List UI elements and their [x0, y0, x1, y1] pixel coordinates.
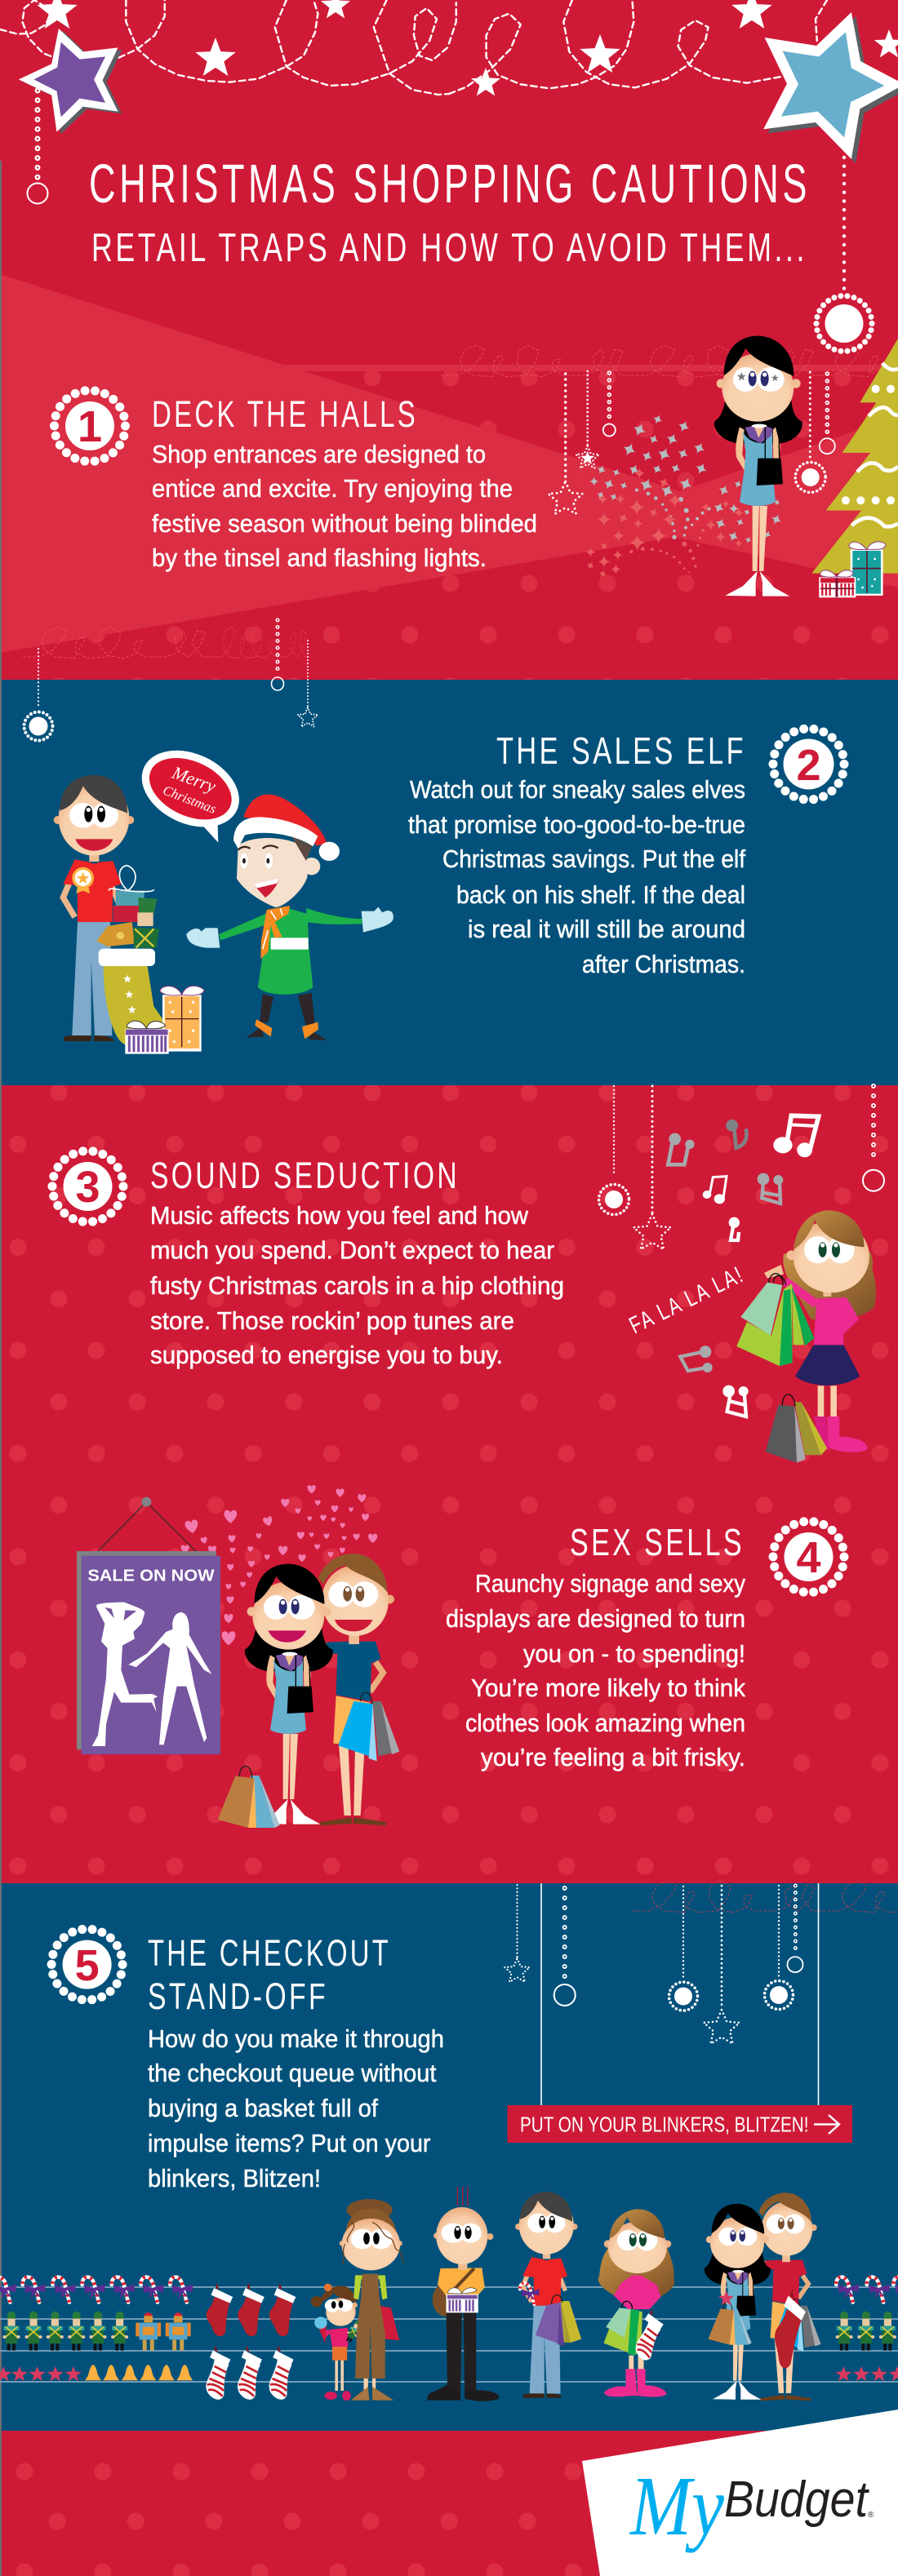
pink stars [0, 2366, 82, 2381]
section 4 text: you’re feeling a bit frisky. [481, 1743, 745, 1771]
child [311, 2284, 363, 2401]
purple and gold bags [520, 2283, 581, 2346]
blue star [763, 12, 898, 163]
section 2 text: Watch out for sneaky sales elves [410, 775, 745, 804]
hearts [181, 1485, 377, 1645]
section 3 text [150, 1201, 564, 1369]
christmas tree with gifts [811, 339, 898, 597]
section 5 heading: STAND-OFF [148, 1975, 328, 2017]
section 1 heading: DECK THE HALLS [152, 393, 418, 435]
section 5 badge: 5 [75, 1941, 100, 1990]
section 2 text: back on his shelf. If the deal [456, 880, 745, 909]
hanging bead string with ring, left [28, 91, 47, 204]
section 4 poster with hearts [77, 1485, 377, 1754]
music notes [668, 1115, 819, 1417]
girl with bags in queue [598, 2209, 674, 2397]
section 2 hanging decorations [24, 620, 318, 741]
section 1 text: festive season without being blinded [152, 509, 537, 538]
woman with sparkling eyes [714, 336, 802, 596]
striped stockings [206, 2345, 294, 2400]
pink stars [835, 2366, 898, 2381]
section 5 text: How do you make it through [148, 2024, 444, 2053]
section 5 heading [148, 1932, 391, 2017]
purple gift [125, 1021, 169, 1054]
section 1 text: Shop entrances are designed to [152, 440, 486, 468]
customer with candy cane and bags [515, 2192, 581, 2398]
section 5 text: blinkers, Blitzen! [148, 2164, 321, 2192]
section 4 text: displays are designed to turn [446, 1604, 745, 1633]
section 3 hanging decorations [599, 1086, 884, 1249]
section 1 badge [54, 390, 126, 462]
red stockings [207, 2282, 296, 2336]
couple [218, 1554, 399, 1828]
speech bubble merry christmas: Merry [169, 762, 219, 796]
woman in overalls [340, 2199, 404, 2401]
section 2 heading: THE SALES ELF [496, 729, 746, 772]
section 5 hanging decorations [505, 1885, 803, 2044]
section 3 heading: SOUND SEDUCTION [150, 1155, 460, 1196]
sales elf [186, 795, 393, 1040]
right shelf items [427, 2186, 898, 2401]
mouth [75, 839, 113, 851]
candy canes [836, 2277, 898, 2303]
section 4 heading: SEX SELLS [570, 1521, 745, 1563]
ribbon badge [72, 867, 94, 893]
section 4 badge: 4 [796, 1533, 821, 1582]
poster: SALE ON NOW [87, 1566, 215, 1585]
section 1 text [152, 440, 537, 572]
section 5 heading: THE CHECKOUT [148, 1932, 391, 1974]
section 2 blue band [0, 680, 898, 1085]
section 5 text: impulse items? Put on your [148, 2129, 431, 2157]
top dashed garland left [0, 0, 449, 95]
section 2 text: that promise too-good-to-be-true [408, 810, 745, 839]
section 3 badge [52, 1151, 123, 1222]
section 2 text: is real it will still be around [468, 915, 745, 943]
poster [77, 1497, 220, 1754]
section 4 text: Raunchy signage and sexy [475, 1569, 745, 1598]
sparkles [585, 413, 784, 579]
section 2 badge: 2 [796, 741, 821, 790]
shopping girl [736, 1210, 876, 1463]
hanging ornament, right [816, 157, 872, 351]
section 3 text: Music affects how you feel and how [150, 1201, 529, 1230]
section 5 text: buying a basket full of [148, 2094, 378, 2122]
speech bubble merry christmas: Christmas [161, 783, 218, 817]
section 3 text: supposed to energise you to buy. [150, 1341, 503, 1369]
mybudget logo [629, 2459, 874, 2553]
section 3 text: much you spend. Don’t expect to hear [150, 1235, 554, 1265]
faint garlands [23, 345, 898, 658]
orange gift [160, 986, 204, 1052]
purple star [19, 29, 122, 134]
stacked gifts and toys [96, 866, 159, 948]
left shelf items [0, 2199, 404, 2401]
bells [85, 2365, 193, 2380]
section 1 hanging decorations [549, 371, 835, 514]
section 5 badge [51, 1929, 122, 2000]
spotlight beam [0, 274, 898, 653]
section 4 text [446, 1569, 745, 1771]
section 4 text: You’re more likely to think [471, 1674, 745, 1702]
hanging sign: PUT ON YOUR BLINKERS, BLITZEN! [520, 2112, 808, 2136]
stocking [99, 949, 166, 1044]
hanging sign [508, 1883, 852, 2143]
section 2 badge [773, 729, 844, 800]
section 1 text: entice and excite. Try enjoying the [152, 474, 513, 503]
section 5 text [148, 2024, 444, 2192]
section 1 badge: 1 [78, 402, 102, 451]
section 2 text: Christmas savings. Put the elf [442, 845, 745, 873]
customer with stocking and gifts [54, 775, 204, 1054]
section 5 blue band [0, 1883, 898, 2431]
footer white corner [582, 2410, 898, 2576]
shelf lines [0, 2287, 898, 2382]
candy canes [0, 2277, 193, 2303]
section 1 text: by the tinsel and flashing lights. [152, 543, 487, 572]
section 2 text: after Christmas. [582, 950, 745, 978]
section 5 text: the checkout queue without [148, 2059, 437, 2087]
mybudget logo: Budget [724, 2472, 869, 2528]
fa la la text: FA LA LA LA! [625, 1261, 749, 1339]
section 4 badge [773, 1521, 844, 1593]
section 3 badge: 3 [75, 1163, 100, 1212]
nutcrackers [836, 2312, 896, 2351]
section 3 text: fusty Christmas carols in a hip clothing [150, 1271, 564, 1300]
section 4 text: you on - to spending! [523, 1639, 745, 1668]
mybudget logo: My [629, 2459, 725, 2553]
red garland in section 5 [633, 1881, 898, 1913]
top dashed garland right [449, 0, 827, 94]
section 4 text: clothes look amazing when [465, 1709, 745, 1737]
man with mohawk and basket [427, 2186, 499, 2401]
nutcrackers and robots [3, 2312, 191, 2351]
couple in queue [705, 2192, 821, 2401]
section 3 text: store. Those rockin’ pop tunes are [150, 1306, 514, 1335]
mybudget logo: ® [868, 2511, 874, 2520]
white stars at top [37, 0, 898, 95]
speech bubble merry christmas [129, 736, 251, 843]
section 2 text [408, 775, 745, 978]
